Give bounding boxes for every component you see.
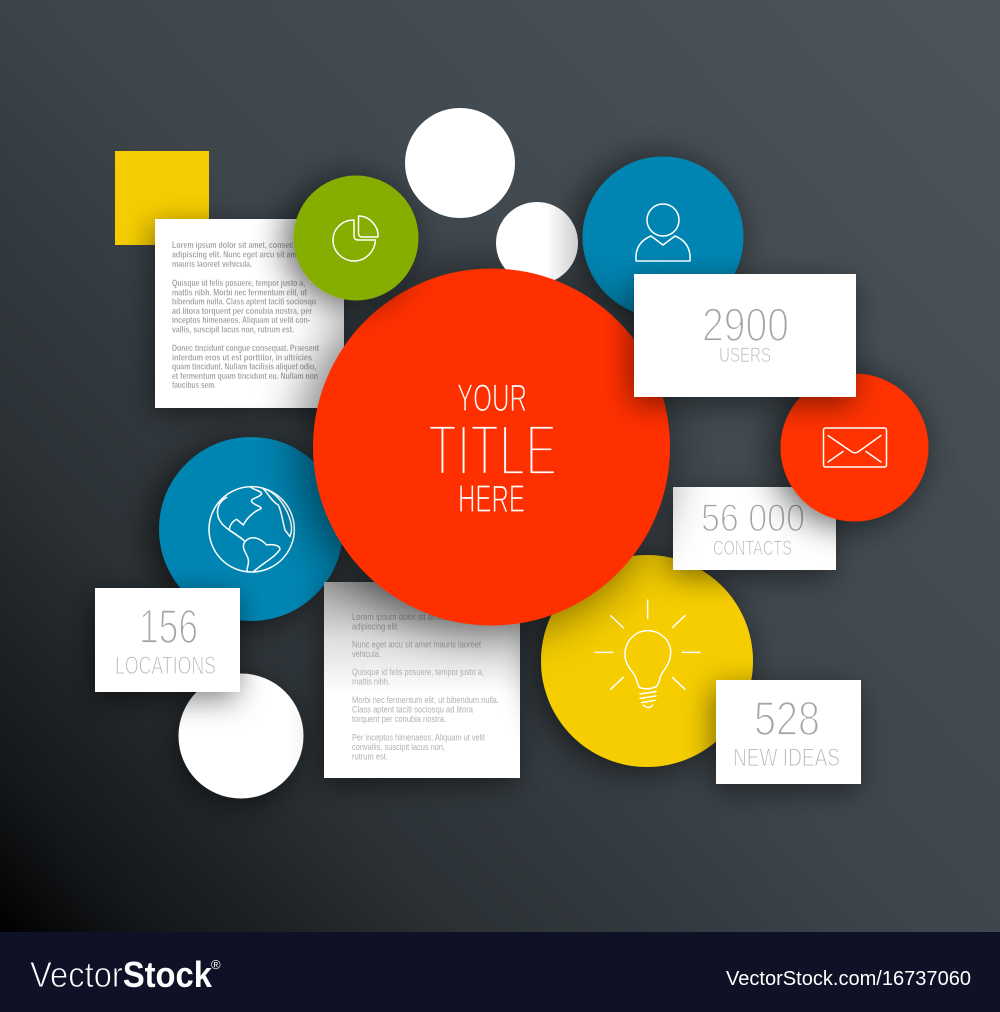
circle: green chart [294,176,418,300]
upper paragraph text: Lorem ipsum dolor sit amet, consectetur [172,240,309,250]
lower paragraph text: mattis nibh. [352,676,390,686]
label: users: USERS [719,344,771,367]
upper paragraph text: mauris laoreet vehicula. [172,259,252,269]
footer logo: VectorStock [30,954,213,995]
registered mark: ® [211,957,221,972]
title: here: HERE [458,478,525,521]
circle: blue user [582,156,744,318]
panel: upper text block [155,219,344,408]
lower paragraph text: rutrum est. [352,752,388,762]
circle: blue globe [159,437,343,621]
upper paragraph text: adipiscing elit. Nunc eget arcu sit amet [172,250,303,260]
icon: globe [209,487,294,572]
upper paragraph text: faucibus sem. [172,380,216,390]
lower paragraph text: Lorem ipsum dolor sit amet, consectetur [352,612,489,622]
icon: user [636,204,690,261]
card: users [634,274,856,397]
title: your: YOUR [457,377,527,420]
upper paragraph text: quam tincidunt. Nullam facilisis aliquet odio, [172,362,316,372]
white circle: top [405,108,515,218]
card: locations [95,588,240,692]
upper paragraph text: et fermentum quam tincidunt eu. Nullam non [172,371,318,381]
main circle shadow [300,266,668,634]
lower paragraph text: Nunc eget arcu sit amet mauris laoreet [352,640,481,650]
footer band [0,932,1000,1012]
lower paragraph text: Morbi nec fermentum elit, ut bibendum nulla. [352,695,499,705]
upper paragraph text: interdum eros ut est porttitor, in ultricies [172,352,312,362]
label: new ideas: NEW IDEAS [733,744,840,772]
icon: pie chart [333,216,378,261]
upper paragraph text: vallis, suscipit lacus non, rutrum est. [172,324,294,334]
panel: lower text block [324,582,520,778]
yellow square [115,151,209,245]
white circle: bottom left [178,674,304,798]
lower paragraph text: Per inceptos himenaeos. Aliquam ut velit [352,732,485,742]
upper paragraph text: Donec tincidunt congue consequat. Praesent [172,343,319,353]
card: new ideas [716,680,861,784]
title: main word: TITLE [428,411,557,491]
main title circle [313,268,670,626]
white circle: small [496,202,578,284]
label: contacts: CONTACTS [713,537,792,560]
lower paragraph text: adipiscing elit. [352,622,399,632]
footer url: VectorStock.com/16737060 [726,968,971,990]
card: contacts [673,487,836,570]
lower paragraph text: Quisque id felis posuere, tempor justo a, [352,667,484,677]
lower paragraph text: vehicula. [352,649,381,659]
circle: red mail [780,374,928,522]
icon: envelope [824,428,886,467]
stat: 2900: 2900 [702,298,789,351]
stat: 156: 156 [139,601,198,654]
lower paragraph text [352,612,499,762]
icon: light bulb [595,600,700,707]
upper paragraph text: bibendum nulla. Class aptent taciti sociosqu [172,297,316,307]
label: locations: LOCATIONS [115,652,216,680]
upper paragraph text [172,240,319,390]
lower paragraph text: Class aptent taciti sociosqu ad litora [352,704,473,714]
stat: 56 000: 56 000 [701,497,805,540]
upper paragraph text: Quisque id felis posuere, tempor justo a, [172,278,305,288]
lower paragraph text: torquent per conubia nostra. [352,714,446,724]
lower paragraph text: convallis, suscipit lacus non, [352,742,445,752]
stat: 528: 528 [754,693,820,746]
upper paragraph text: mattis nibh. Morbi nec fermentum elit, ut [172,287,307,297]
circle: yellow idea [541,555,753,767]
upper paragraph text: ad litora torquent per conubia nostra, per [172,306,312,316]
upper paragraph text: inceptos himenaeos. Aliquam ut velit con- [172,315,310,325]
